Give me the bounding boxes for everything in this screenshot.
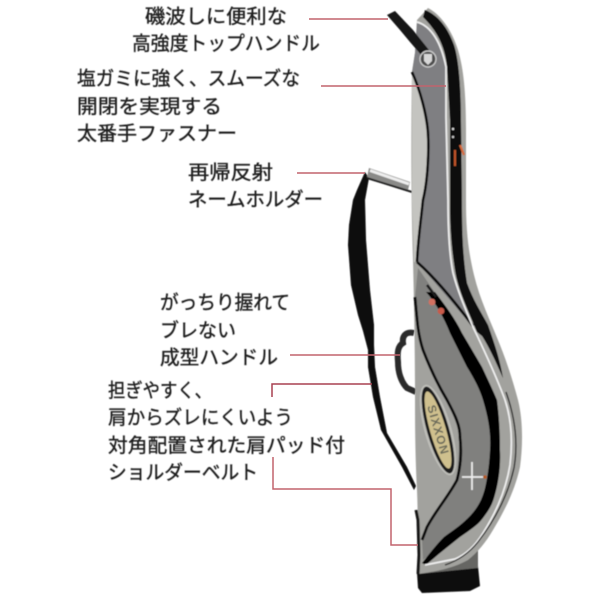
brand name: SIXXON <box>424 403 452 457</box>
callout: molded handle: ブレない <box>160 319 236 342</box>
callout: shoulder belt: ショルダーベルト <box>108 462 258 484</box>
callout: top handle: 高強度トップハンドル <box>132 33 320 55</box>
callout: shoulder belt: 対角配置された肩パッド付 <box>108 435 345 457</box>
zipper pull <box>452 128 464 166</box>
pocket zipper pulls <box>427 285 444 314</box>
thick black band <box>422 292 500 565</box>
lower strap buckle <box>416 510 419 574</box>
cross logo <box>462 462 487 490</box>
callout: top handle: 磯波しに便利な <box>145 6 287 28</box>
callout: molded handle: がっちり握れて <box>160 292 290 314</box>
S curve seam <box>415 297 461 540</box>
shoulder belt <box>348 168 416 490</box>
left light strip <box>412 72 428 262</box>
name holder tube <box>367 168 412 192</box>
callout: name holder: ネームホルダー <box>188 189 323 211</box>
callout: molded handle <box>160 292 290 369</box>
callout: zipper: 太番手ファスナー <box>77 123 237 145</box>
neck <box>418 545 478 574</box>
callout: molded handle: 成型ハンドル <box>160 347 278 369</box>
pocket and lower panel <box>415 268 492 560</box>
shoulder badge <box>420 51 436 67</box>
zipper band <box>423 10 503 378</box>
molded handle <box>398 333 416 392</box>
upper main panel <box>412 22 473 327</box>
belt strap <box>348 172 416 490</box>
upper left seam <box>412 72 428 262</box>
callout: zipper: 開閉を実現する <box>77 96 222 118</box>
outer dark stripe <box>445 392 516 565</box>
brand oval patch <box>412 381 464 479</box>
callout: zipper: 塩ガミに強く、スムーズな <box>77 68 300 90</box>
callout: shoulder belt: 肩からズレにくいよう <box>108 407 293 429</box>
callout: top handle <box>132 6 320 55</box>
white piping <box>417 22 511 565</box>
callout: name holder: 再帰反射 <box>188 162 273 184</box>
callout: name holder <box>188 162 323 211</box>
base foot <box>417 566 480 593</box>
callout: shoulder belt: 担ぎやすく、 <box>108 380 212 402</box>
rod case bag <box>387 8 522 593</box>
thin diagonal seam <box>417 262 473 326</box>
leader lines <box>272 19 446 545</box>
top handle <box>387 11 429 56</box>
callout: shoulder belt <box>108 380 345 484</box>
bag silhouette <box>411 8 522 574</box>
callout: zipper <box>77 68 300 145</box>
